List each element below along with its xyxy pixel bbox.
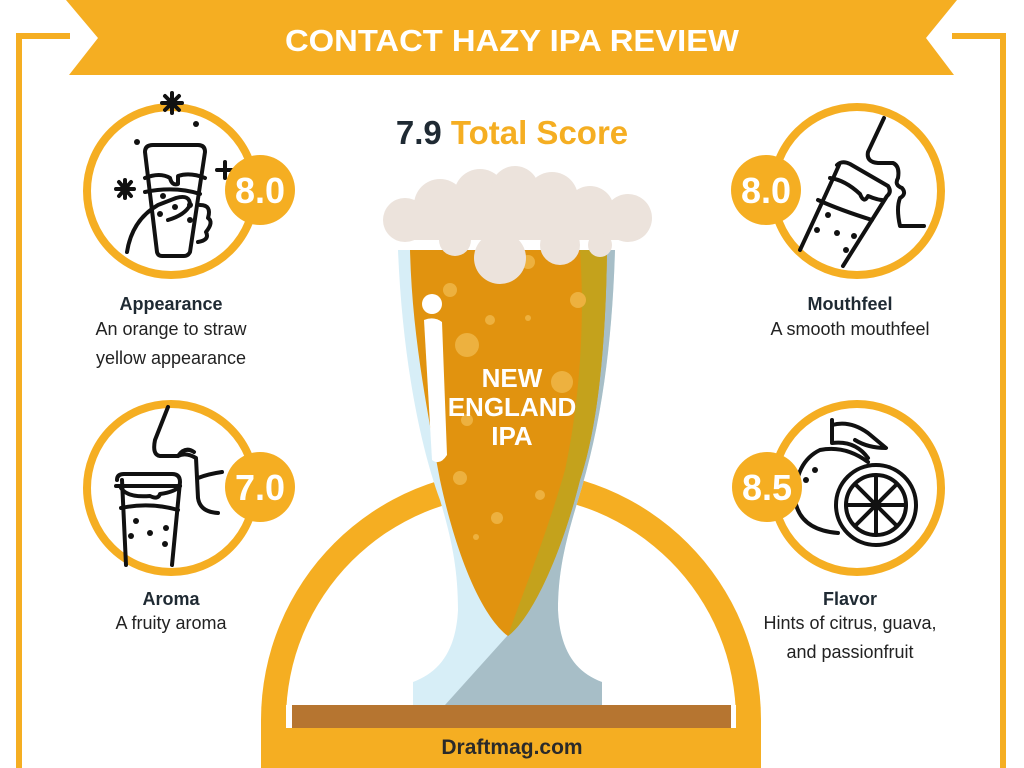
glass shade: [445, 250, 615, 705]
label: Mouthfeel: [808, 294, 892, 314]
beer: [410, 250, 607, 636]
panel: appearance: 8.0: [235, 170, 285, 211]
arch pedestal: [261, 470, 761, 768]
panel: aroma: 7.0: [235, 467, 285, 508]
footer credit: Draftmag.com: [441, 736, 583, 759]
beer greenish side: [508, 250, 607, 636]
panel: flavor: Hints of citrus, guava,: [763, 613, 937, 633]
panel: appearance: yellow appearance: [96, 348, 246, 368]
title text: CONTACT HAZY IPA REVIEW: [285, 23, 740, 58]
panel: flavor: [732, 404, 941, 662]
panel: flavor: 8.5: [742, 467, 792, 508]
score badge: [731, 155, 801, 225]
beer glass: ENGLAND: [448, 392, 576, 422]
label: Flavor: [823, 589, 877, 609]
score badge: [225, 155, 295, 225]
score badge: [225, 452, 295, 522]
icon: beer in hand: [116, 93, 233, 256]
beer glass: IPA: [491, 421, 533, 451]
glass body: [398, 250, 615, 705]
icon: drinking beer: [800, 118, 924, 266]
total score: 7.9 Total Score: [396, 114, 628, 151]
title banner: [66, 0, 957, 75]
panel: aroma: A fruity aroma: [115, 613, 228, 633]
icon: nose and beer: [116, 407, 222, 565]
panel: mouthfeel: A smooth mouthfeel: [770, 319, 930, 339]
label: Appearance: [119, 294, 223, 314]
label: Aroma: [142, 589, 200, 609]
icon: citrus: [795, 420, 916, 545]
glass label: NEW: [482, 363, 543, 393]
foam: [383, 166, 652, 284]
panel: mouthfeel: 8.0: [741, 170, 791, 211]
panel: appearance: [87, 93, 295, 368]
panel: mouthfeel: [731, 107, 941, 339]
panel: appearance: An orange to straw: [95, 319, 248, 339]
score badge: [732, 452, 802, 522]
panel: flavor: and passionfruit: [786, 642, 914, 662]
panel: aroma: [87, 404, 295, 633]
bubbles: [443, 255, 586, 540]
highlight: [422, 294, 447, 462]
beer glass: [383, 166, 652, 705]
